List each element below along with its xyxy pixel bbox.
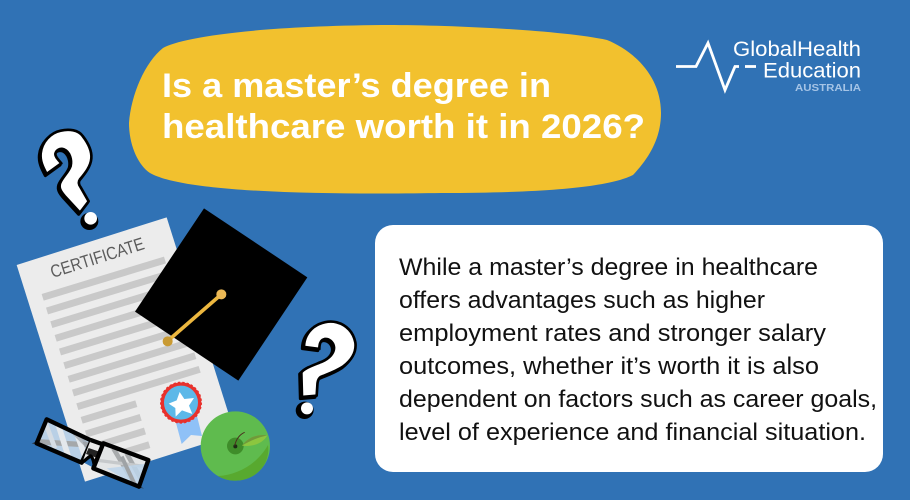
summary paragraph: dependent on factors such as career goals, [399,386,877,413]
summary paragraph: offers advantages such as higher [399,287,765,314]
summary paragraph [399,254,877,446]
logo wordmark: Education [763,58,861,82]
certificate text lines [43,260,200,461]
summary paragraph: While a master’s degree in healthcare [399,254,818,281]
illustration: certificate, cap, glasses, apple, question marks [17,130,356,489]
logo wordmark: AUSTRALIA [795,83,861,94]
summary paragraph: level of experience and financial situation. [399,419,866,446]
icon: apple [201,411,270,481]
icon: rosette seal with ribbon [161,383,202,444]
logo wordmark [733,37,861,94]
icon: graduation cap [135,208,307,381]
heading: healthcare worth it in 2026? [162,108,645,146]
summary paragraph: outcomes, whether it’s worth it is also [399,353,819,380]
icon: certificate document [17,217,235,482]
summary paragraph: employment rates and stronger salary [399,320,826,347]
certificate heading: CERTIFICATE [48,233,147,282]
title panel: yellow blob with heading [129,25,661,194]
heading: Is a master’s degree in [162,67,551,105]
icon: question mark top left [39,130,98,230]
icon: heartbeat pulse line [676,43,756,90]
icon: question mark right [293,322,356,422]
icon: glasses [32,419,150,489]
logo wordmark: GlobalHealth [733,37,861,61]
left lens [37,419,92,463]
bridge [83,440,105,468]
logo: Global Health Education Australia [676,37,861,94]
right lens [93,443,150,488]
heading [162,67,645,146]
panel: summary text card [375,225,883,472]
